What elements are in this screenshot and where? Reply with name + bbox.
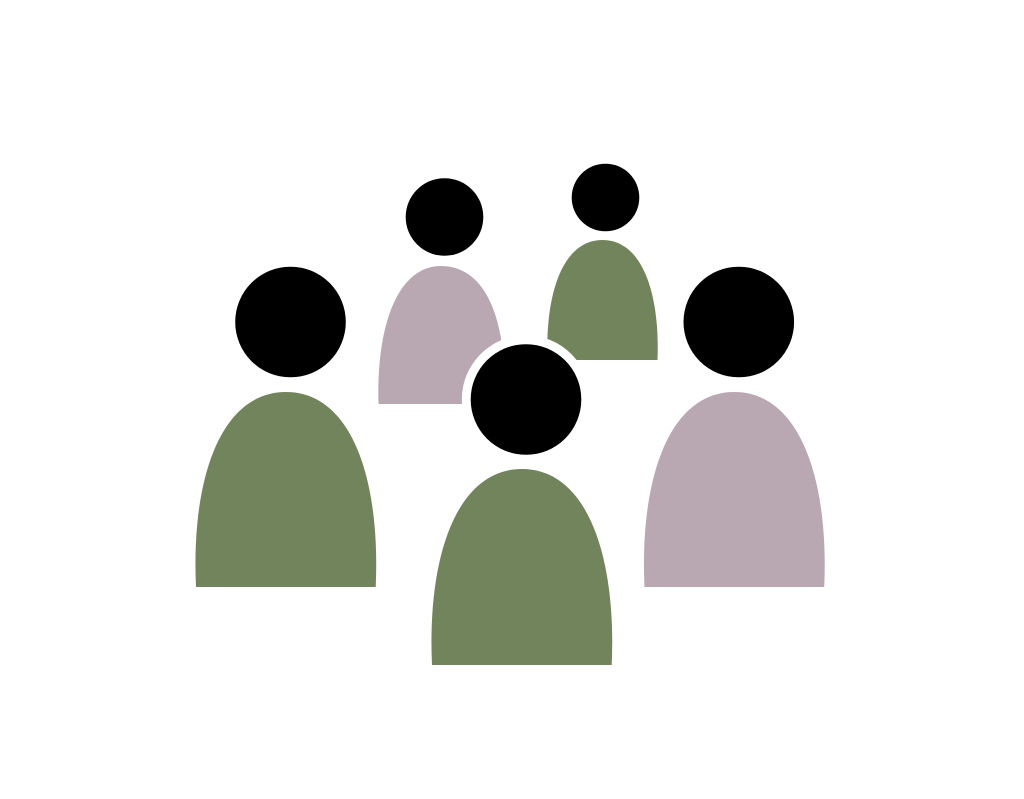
person: front centre, green, with white halo [431,335,612,665]
person: back right, green [547,164,658,360]
person: left, green [195,267,376,587]
person: back left, mauve [378,178,502,404]
person: right, mauve [644,267,825,587]
